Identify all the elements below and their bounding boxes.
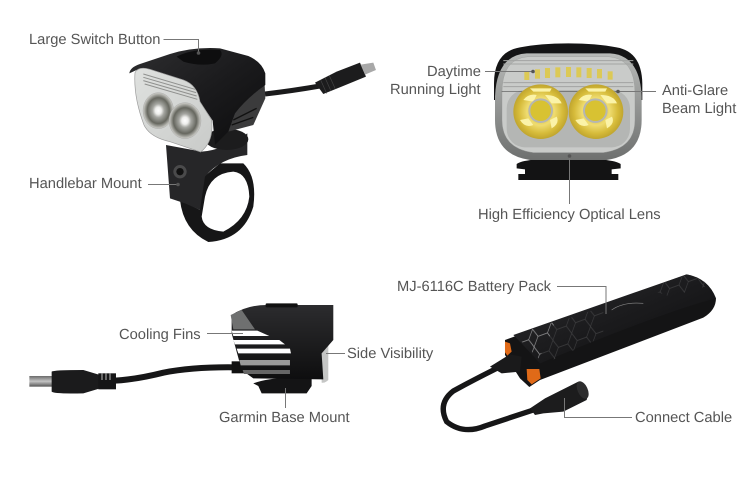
mount bracket bbox=[166, 133, 247, 210]
power cable bbox=[265, 86, 320, 94]
housing bbox=[494, 43, 642, 100]
anti-glare divider bbox=[502, 91, 635, 93]
side lens bbox=[322, 340, 328, 383]
reflectors bbox=[143, 93, 174, 129]
label: High Efficiency Optical Lens bbox=[478, 154, 661, 223]
cable end connector bbox=[530, 379, 591, 415]
label: Cooling Fins: Cooling Fins bbox=[119, 327, 201, 343]
label: Connect Cable: Connect Cable bbox=[635, 410, 732, 426]
label: Daytime Running Light bbox=[390, 64, 535, 98]
swivel base bbox=[205, 129, 248, 150]
label: Large Switch Button: Large Switch Button bbox=[29, 32, 160, 48]
label: MJ-6116C Battery Pack bbox=[397, 279, 606, 314]
label: Connect Cable bbox=[564, 398, 732, 426]
label: Daytime Running Light: Daytime bbox=[427, 64, 481, 80]
label: Garmin Base Mount: Garmin Base Mount bbox=[219, 410, 350, 426]
label: Anti-Glare Beam Light bbox=[616, 83, 736, 117]
brand logo bbox=[612, 303, 643, 310]
cable connector bbox=[29, 370, 116, 393]
orange port caps bbox=[505, 342, 541, 384]
power cable bbox=[115, 367, 237, 381]
label: High Efficiency Optical Lens: High Efficiency Optical Lens bbox=[478, 207, 661, 223]
hexagon pattern bbox=[515, 274, 712, 363]
product: side view headlight bbox=[29, 303, 333, 393]
label: Anti-Glare Beam Light: Anti-Glare bbox=[662, 83, 728, 99]
label: Garmin Base Mount bbox=[219, 388, 350, 426]
product: front view headlight bbox=[494, 43, 642, 180]
switch button bbox=[177, 50, 222, 65]
port plug bbox=[490, 354, 522, 373]
left beam reflector bbox=[513, 84, 568, 139]
handlebar clamp band bbox=[180, 163, 254, 242]
daytime light LEDs bbox=[503, 61, 633, 87]
head body bbox=[129, 48, 265, 145]
connect cable bbox=[443, 368, 533, 430]
cooling fins bbox=[231, 310, 291, 374]
label: Side Visibility: Side Visibility bbox=[347, 346, 434, 362]
label: MJ-6116C Battery Pack: MJ-6116C Battery Pack bbox=[397, 279, 552, 295]
daytime light strip bbox=[143, 74, 197, 99]
product: front three-quarter headlight bbox=[129, 48, 376, 242]
cable connector bbox=[315, 63, 376, 94]
lens bbox=[135, 68, 212, 152]
front cover tab bbox=[266, 303, 298, 307]
body bbox=[232, 305, 333, 379]
lens body bbox=[495, 53, 642, 160]
label: Cooling Fins bbox=[119, 327, 243, 343]
mount base bbox=[253, 378, 312, 393]
label: Handlebar Mount: Handlebar Mount bbox=[29, 176, 142, 192]
label: Large Switch Button bbox=[29, 32, 200, 55]
product: battery pack bbox=[443, 274, 716, 430]
mount base bbox=[517, 158, 621, 180]
label: Daytime Running Light: Running Light bbox=[390, 82, 481, 98]
label: Anti-Glare Beam Light: Beam Light bbox=[662, 101, 736, 117]
rear cooling fins bbox=[228, 85, 265, 132]
battery body bbox=[505, 274, 716, 387]
right beam reflector bbox=[569, 84, 623, 139]
